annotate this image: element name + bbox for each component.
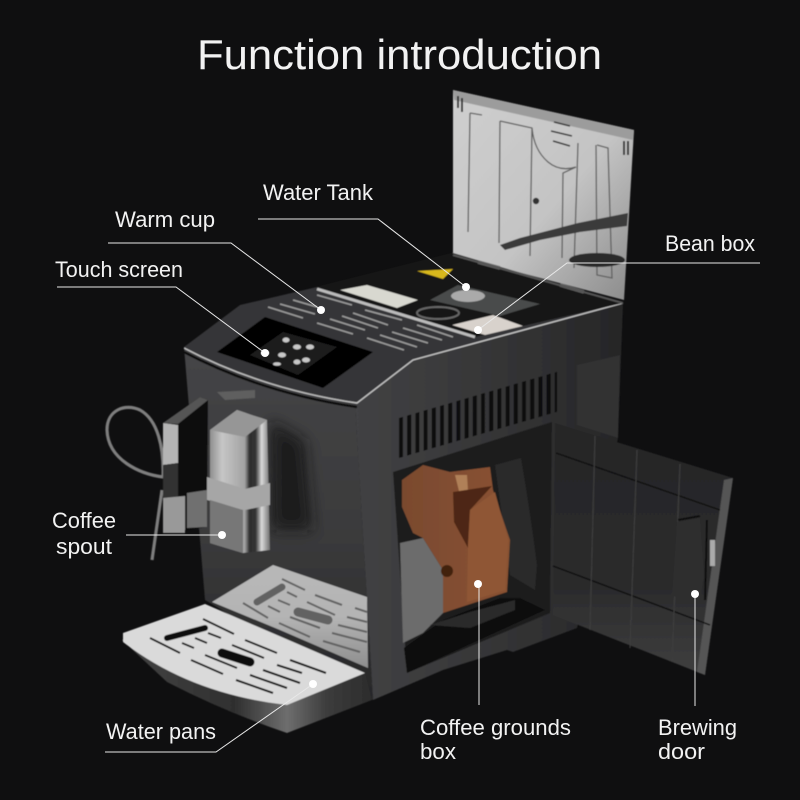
touch screen panel — [217, 317, 373, 388]
machine front panel — [184, 347, 373, 700]
water tank lid mechanism — [451, 290, 485, 302]
door latch — [672, 518, 704, 600]
yellow warning label — [417, 269, 453, 279]
callout: warm cup — [108, 207, 325, 314]
callout: brewing door — [658, 590, 737, 764]
side vent slots — [399, 392, 557, 438]
callout: coffee grounds box: Coffee grounds — [420, 715, 571, 740]
coffee spout — [207, 410, 270, 553]
callout: water pans: Water pans — [106, 719, 216, 744]
brown brewing unit — [402, 465, 510, 613]
callout: touch screen — [55, 257, 269, 357]
brewing door — [553, 423, 733, 675]
callout: brewing door: door — [658, 739, 705, 764]
drip tray plate — [123, 604, 365, 705]
stainless reflection behind tray — [212, 565, 368, 668]
storage bay under the lid — [317, 253, 623, 337]
rail between vents and bay — [317, 289, 475, 337]
milk hose — [107, 407, 163, 560]
rear side panel — [577, 355, 620, 438]
callout: coffee spout: Coffee — [52, 508, 116, 533]
callout: coffee spout: spout — [56, 534, 112, 559]
callout: warm cup: Warm cup — [115, 207, 215, 232]
callout: brewing door: Brewing — [658, 715, 737, 740]
drip tray base — [122, 604, 372, 733]
milk spout — [163, 397, 208, 533]
warm cup vents — [268, 295, 453, 350]
reflection band on lid — [500, 213, 628, 250]
callout: bean box — [474, 231, 760, 334]
callout: water pans — [105, 680, 317, 752]
instruction paper — [340, 285, 418, 308]
open brewing bay — [393, 422, 552, 673]
callout: coffee spout — [52, 508, 226, 559]
callout: water tank: Water Tank — [263, 180, 374, 205]
callout: touch screen: Touch screen — [55, 257, 183, 282]
callout: bean box: Bean box — [665, 231, 755, 256]
hinges — [478, 262, 584, 292]
grounds container — [400, 538, 443, 643]
coffee machine illustration — [107, 90, 733, 733]
raised lid of the bean box — [453, 90, 634, 300]
hot water knob — [217, 390, 255, 400]
spout shadow on front panel — [270, 420, 312, 530]
callout: coffee grounds box — [420, 580, 571, 764]
bean box paper — [452, 315, 523, 335]
callout: water tank — [258, 180, 470, 291]
machine top surface — [184, 253, 623, 402]
callout: coffee grounds box: box — [420, 739, 456, 764]
machine right side panel — [355, 303, 623, 700]
title: Function introduction — [197, 31, 602, 78]
